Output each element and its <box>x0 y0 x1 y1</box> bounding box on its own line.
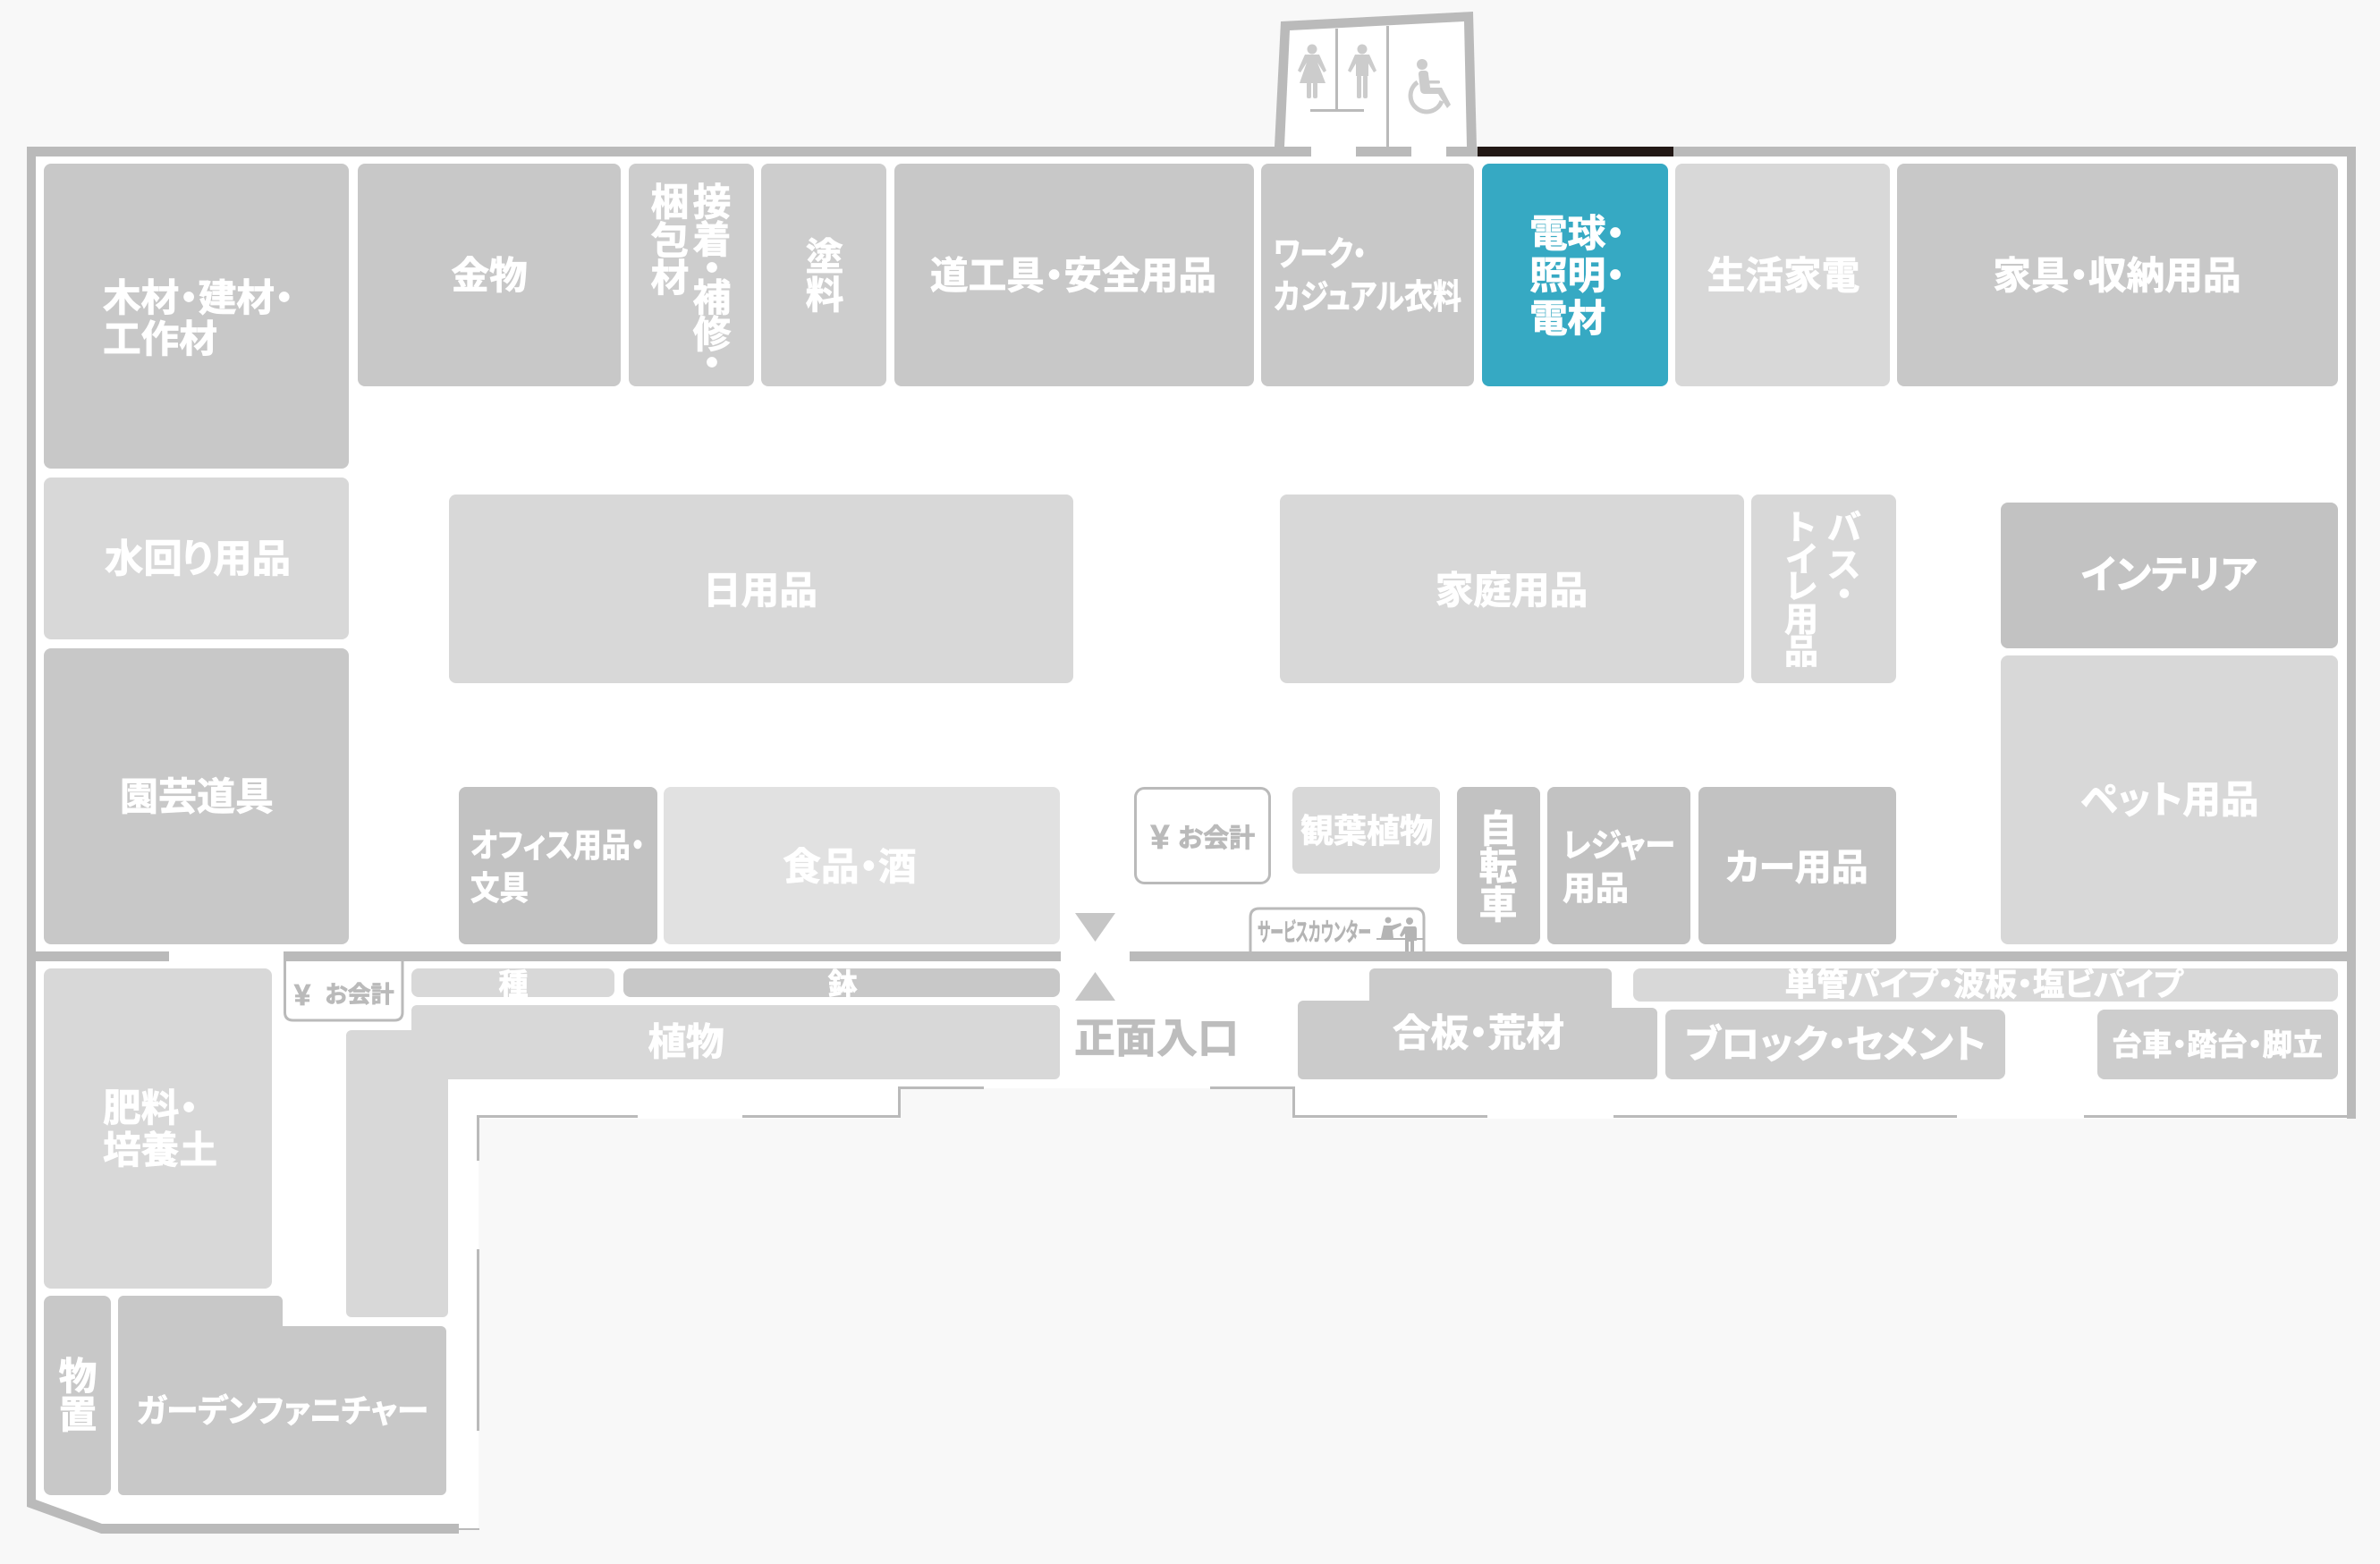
panel: 水回り用品: 水回り用品 <box>105 538 291 581</box>
panel: 鉢 <box>623 968 1060 1001</box>
panel: 金物: 金物 <box>451 255 528 298</box>
panel: 植物 <box>351 1010 1054 1312</box>
panel: バス・トイレ用品 <box>1751 495 1896 683</box>
panel: 自転車: 自 <box>1479 808 1517 851</box>
panel: 合板・荒材 <box>1303 974 1652 1074</box>
panel: 家具・収納用品: 家具・収納用品 <box>1993 255 2241 298</box>
panel: 塗料: 料 <box>806 275 843 317</box>
panel: インテリア <box>2001 503 2338 648</box>
panel: ペット用品: ペット用品 <box>2080 779 2259 822</box>
panel: 道工具・安全用品 <box>894 164 1254 386</box>
panel: 自転車: 転 <box>1479 846 1517 889</box>
panel: ブロック・セメント <box>1665 1010 2005 1079</box>
panel: ガーデンファニチャー <box>123 1301 441 1490</box>
panel: 木材・建材・工作材 <box>44 164 349 469</box>
panel: 単管パイプ・波板・塩ビパイプ <box>1633 967 2338 1002</box>
panel: 肥料・培養土: 培養土 <box>103 1129 217 1172</box>
panel: 接着・補修・梱包材: 修 <box>693 314 732 357</box>
panel: 家庭用品 <box>1280 495 1744 683</box>
icon: wheelchair <box>1410 59 1451 112</box>
panel: 道工具・安全用品: 道工具・安全用品 <box>930 255 1216 298</box>
panel: レジャー用品: 用品 <box>1563 870 1629 907</box>
panel: 日用品 <box>449 495 1073 683</box>
checkout counter <box>1136 789 1270 883</box>
panel: 水回り用品 <box>44 478 349 639</box>
arrow: entrance up <box>1075 972 1115 1001</box>
panel: 接着・補修・梱包材: 接 <box>693 182 731 224</box>
panel: レジャー用品 <box>1547 787 1690 944</box>
panel: 木材・建材・工作材: 木材・建材・ <box>103 277 293 320</box>
panel: 接着・補修・梱包材: ・ <box>702 248 722 291</box>
panel: 台車・踏台・脚立: 台車・踏台・脚立 <box>2112 1028 2323 1062</box>
panel: バス・トイレ用品: ス <box>1828 547 1860 585</box>
panel: 台車・踏台・脚立 <box>2097 1010 2338 1079</box>
panel: 自転車: 車 <box>1479 884 1517 927</box>
panel: 生活家電 <box>1675 164 1890 386</box>
panel: オフィス用品・文具 <box>459 787 657 944</box>
restroom walls <box>1275 12 1477 147</box>
checkout counter: ¥ <box>1150 819 1170 857</box>
panel: 種: 種 <box>499 968 528 1001</box>
panel: ワーク・カジュアル衣料 <box>1261 164 1474 386</box>
panel: 接着・補修・梱包材: 梱 <box>651 182 689 224</box>
panel: バス・トイレ用品: バ <box>1827 510 1861 547</box>
panel: 金物 <box>358 164 621 386</box>
panel: 園芸道具 <box>44 648 349 944</box>
panel: オフィス用品・文具: オフィス用品・ <box>470 827 645 864</box>
panel: 食品・酒: 食品・酒 <box>783 846 917 889</box>
arrow: entrance down <box>1075 913 1115 942</box>
small checkout counter: お会計 <box>325 981 394 1008</box>
service counter <box>1250 909 1424 951</box>
panel: 木材・建材・工作材: 工作材 <box>103 318 217 361</box>
panel: 自転車 <box>1457 787 1540 944</box>
small checkout counter: ¥ <box>294 978 311 1011</box>
panel: バス・トイレ用品: 品 <box>1784 634 1818 672</box>
panel: 塗料 <box>761 164 886 386</box>
icon: men restroom <box>1348 45 1376 98</box>
panel: ガーデンファニチャー: ガーデンファニチャー <box>137 1392 428 1429</box>
panel: 接着・補修・梱包材: 着 <box>693 219 731 262</box>
panel: 接着・補修・梱包材: 補 <box>693 277 731 320</box>
panel: 物置: 置 <box>59 1394 97 1437</box>
panel: 食品・酒 <box>664 787 1060 944</box>
panel: 電球・照明・電材 (highlighted): 電球・ <box>1529 213 1625 256</box>
panel: カー用品 <box>1698 787 1896 944</box>
panel: 物置: 物 <box>59 1356 97 1399</box>
panel: バス・トイレ用品: レ <box>1785 569 1817 606</box>
panel: 肥料・培養土 <box>44 968 272 1289</box>
panel: 物置 <box>44 1296 111 1495</box>
panel: 観葉植物 <box>1292 787 1440 874</box>
panel: オフィス用品・文具: 文具 <box>470 870 529 907</box>
panel: 肥料・培養土: 肥料・ <box>103 1087 199 1130</box>
panel: 接着・補修・梱包材: 包 <box>651 220 689 263</box>
panel: 日用品: 日用品 <box>703 570 817 613</box>
panel: ワーク・カジュアル衣料: ワーク・ <box>1274 236 1367 274</box>
panel: 家具・収納用品 <box>1897 164 2338 386</box>
panel: 生活家電: 生活家電 <box>1707 255 1859 298</box>
panel: 合板・荒材: 合板・荒材 <box>1393 1012 1564 1055</box>
panel: 電球・照明・電材 (highlighted): 電材 <box>1529 298 1605 341</box>
service counter: サービスカウンター <box>1258 918 1371 946</box>
panel: 電球・照明・電材 (highlighted): 照明・ <box>1529 255 1625 298</box>
small checkout counter <box>284 961 402 1020</box>
panel: 園芸道具: 園芸道具 <box>120 776 274 819</box>
icon: women restroom <box>1298 45 1326 98</box>
panel: 塗料: 塗 <box>806 236 843 279</box>
panel: 電球・照明・電材 (highlighted) <box>1482 164 1668 386</box>
panel: バス・トイレ用品: イ <box>1786 542 1817 579</box>
panel: ワーク・カジュアル衣料: カジュアル衣料 <box>1274 279 1461 317</box>
black entrance segment <box>1478 147 1673 156</box>
panel: 鉢: 鉢 <box>828 968 857 1001</box>
panel: 種 <box>411 968 614 1001</box>
panel: ブロック・セメント: ブロック・セメント <box>1685 1024 1986 1067</box>
panel: 観葉植物: 観葉植物 <box>1300 813 1433 850</box>
panel: カー用品: カー用品 <box>1725 847 1868 888</box>
panel: 家庭用品: 家庭用品 <box>1436 570 1588 613</box>
panel: レジャー用品: レジャー <box>1563 827 1675 864</box>
panel: 接着・補修・梱包材: ・ <box>702 342 722 385</box>
panel: バス・トイレ用品: ・ <box>1835 577 1853 614</box>
panel: バス・トイレ用品: ト <box>1787 510 1816 547</box>
panel: インテリア: インテリア <box>2081 554 2257 597</box>
panel: ペット用品 <box>2001 655 2338 944</box>
heading: 正面入口: 正面入口 <box>1074 1015 1239 1061</box>
panel: バス・トイレ用品: 用 <box>1784 602 1818 639</box>
checkout counter: お会計 <box>1178 824 1255 853</box>
panel: 接着・補修・梱包材 <box>629 164 754 386</box>
panel: 単管パイプ・波板・塩ビパイプ: 単管パイプ・波板・塩ビパイプ <box>1785 967 2184 1002</box>
panel: 植物: 植物 <box>648 1021 724 1064</box>
panel: 接着・補修・梱包材: 材 <box>651 258 689 300</box>
